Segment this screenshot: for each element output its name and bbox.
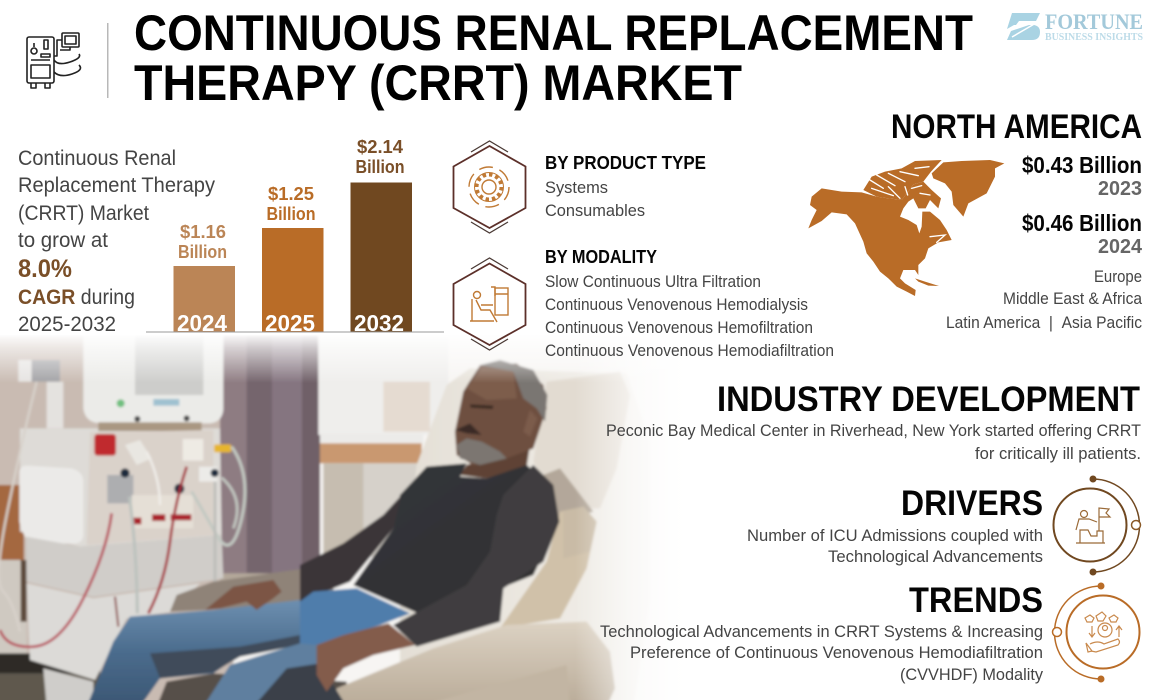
logo: Fortune Business Insights: FORTUNE bbox=[1045, 9, 1143, 34]
text block: regional values: 2024 bbox=[1098, 236, 1143, 258]
text block: other regions: Middle East & Africa bbox=[1003, 290, 1143, 308]
bar 2025: $1.25 bbox=[268, 183, 314, 204]
chair back bbox=[400, 368, 606, 662]
section: trends: (CVVHDF) Modality bbox=[900, 666, 1044, 684]
icon: hexagon gear bbox=[454, 141, 526, 233]
header divider bbox=[107, 23, 108, 98]
shirt bbox=[353, 463, 558, 613]
bar 2032: $2.14 bbox=[357, 136, 404, 157]
bar 2032 bbox=[350, 136, 412, 336]
text block: regional values: $0.46 Billion bbox=[1022, 210, 1142, 236]
section: trends: TRENDS bbox=[909, 581, 1043, 620]
bar 2024: 2024 bbox=[177, 310, 227, 336]
text block: other regions: Europe bbox=[1094, 268, 1142, 286]
section: industry development: for critically ill patients. bbox=[975, 445, 1141, 463]
section: industry development: Peconic Bay Medical Center in Riverhead, New York started offering CRRT bbox=[606, 422, 1141, 440]
icon: CRRT machine bbox=[27, 33, 80, 88]
text block: by product type: Consumables bbox=[545, 202, 645, 220]
text block: by modality: Continuous Venovenous Hemodialysis bbox=[545, 296, 808, 314]
logo: Fortune Business Insights bbox=[1007, 9, 1143, 43]
text block: CAGR summary bbox=[18, 147, 215, 336]
bar 2024: $1.16 bbox=[180, 221, 226, 242]
text block: regional values bbox=[1022, 152, 1143, 258]
section: trends: Preference of Continuous Venovenous Hemodiafiltration bbox=[630, 644, 1043, 662]
bar 2025: 2025 bbox=[265, 310, 315, 336]
bar 2024 bbox=[174, 221, 235, 336]
text block: regional values: 2023 bbox=[1098, 178, 1142, 200]
icon: drivers person with flag bbox=[1054, 476, 1140, 575]
section: trends bbox=[600, 581, 1044, 684]
section: drivers: DRIVERS bbox=[901, 484, 1043, 523]
bar 2032: 2032 bbox=[354, 310, 404, 336]
icon: hexagon patient at machine bbox=[454, 258, 526, 350]
section: industry development bbox=[606, 380, 1141, 463]
text block: by modality bbox=[545, 247, 834, 360]
title: THERAPY (CRRT) MARKET bbox=[134, 55, 742, 111]
text block: CAGR summary: CAGR during bbox=[18, 286, 135, 309]
text block: regional values: $0.43 Billion bbox=[1022, 152, 1142, 178]
text block: CAGR summary: 2025-2032 bbox=[18, 313, 116, 336]
near armrest bbox=[333, 622, 615, 700]
text block: by modality: Continuous Venovenous Hemofiltration bbox=[545, 319, 813, 337]
section: trends: Technological Advancements in CRRT Systems & Increasing bbox=[600, 623, 1043, 641]
neck and head bbox=[460, 445, 530, 478]
logo: Fortune Business Insights: BUSINESS INSIGHTS bbox=[1045, 32, 1143, 43]
far armrest bbox=[170, 565, 333, 612]
text block: by modality: BY MODALITY bbox=[545, 247, 657, 267]
photo fade to white bbox=[0, 333, 705, 700]
section: drivers: Technological Advancements bbox=[828, 548, 1043, 566]
section: drivers: Number of ICU Admissions coupled with bbox=[747, 527, 1043, 545]
bar 2032: Billion bbox=[356, 156, 404, 177]
bar 2024: Billion bbox=[178, 241, 227, 262]
text block: by product type: BY PRODUCT TYPE bbox=[545, 153, 706, 173]
title bbox=[134, 5, 973, 111]
text block: by product type: Systems bbox=[545, 179, 608, 197]
text block: CAGR summary: (CRRT) Market bbox=[18, 202, 149, 225]
text block: by product type bbox=[545, 153, 706, 220]
text block: CAGR summary: to grow at bbox=[18, 229, 108, 252]
bar chart: market size bbox=[146, 136, 444, 336]
bar 2025: Billion bbox=[266, 203, 316, 224]
bar 2025 bbox=[262, 183, 324, 336]
text block: other regions bbox=[946, 268, 1143, 332]
map: North America bbox=[808, 160, 1004, 296]
section: industry development: INDUSTRY DEVELOPMENT bbox=[717, 380, 1140, 419]
text block: other regions: Latin America | Asia Pacific bbox=[946, 314, 1142, 332]
icon: trends rating hand bbox=[1052, 583, 1140, 682]
photo: patient receiving dialysis in a chair bbox=[0, 336, 634, 700]
jeans bbox=[87, 600, 307, 700]
text block: by modality: Slow Continuous Ultra Filtration bbox=[545, 273, 761, 291]
text block: CAGR summary: Replacement Therapy bbox=[18, 174, 215, 197]
hands bbox=[205, 580, 282, 610]
text block: CAGR summary: 8.0% bbox=[18, 255, 72, 283]
text block: CAGR summary: Continuous Renal bbox=[18, 147, 176, 170]
section: drivers bbox=[747, 484, 1043, 566]
text block: by modality: Continuous Venovenous Hemodiafiltration bbox=[545, 342, 834, 360]
title: CONTINUOUS RENAL REPLACEMENT bbox=[134, 5, 973, 61]
